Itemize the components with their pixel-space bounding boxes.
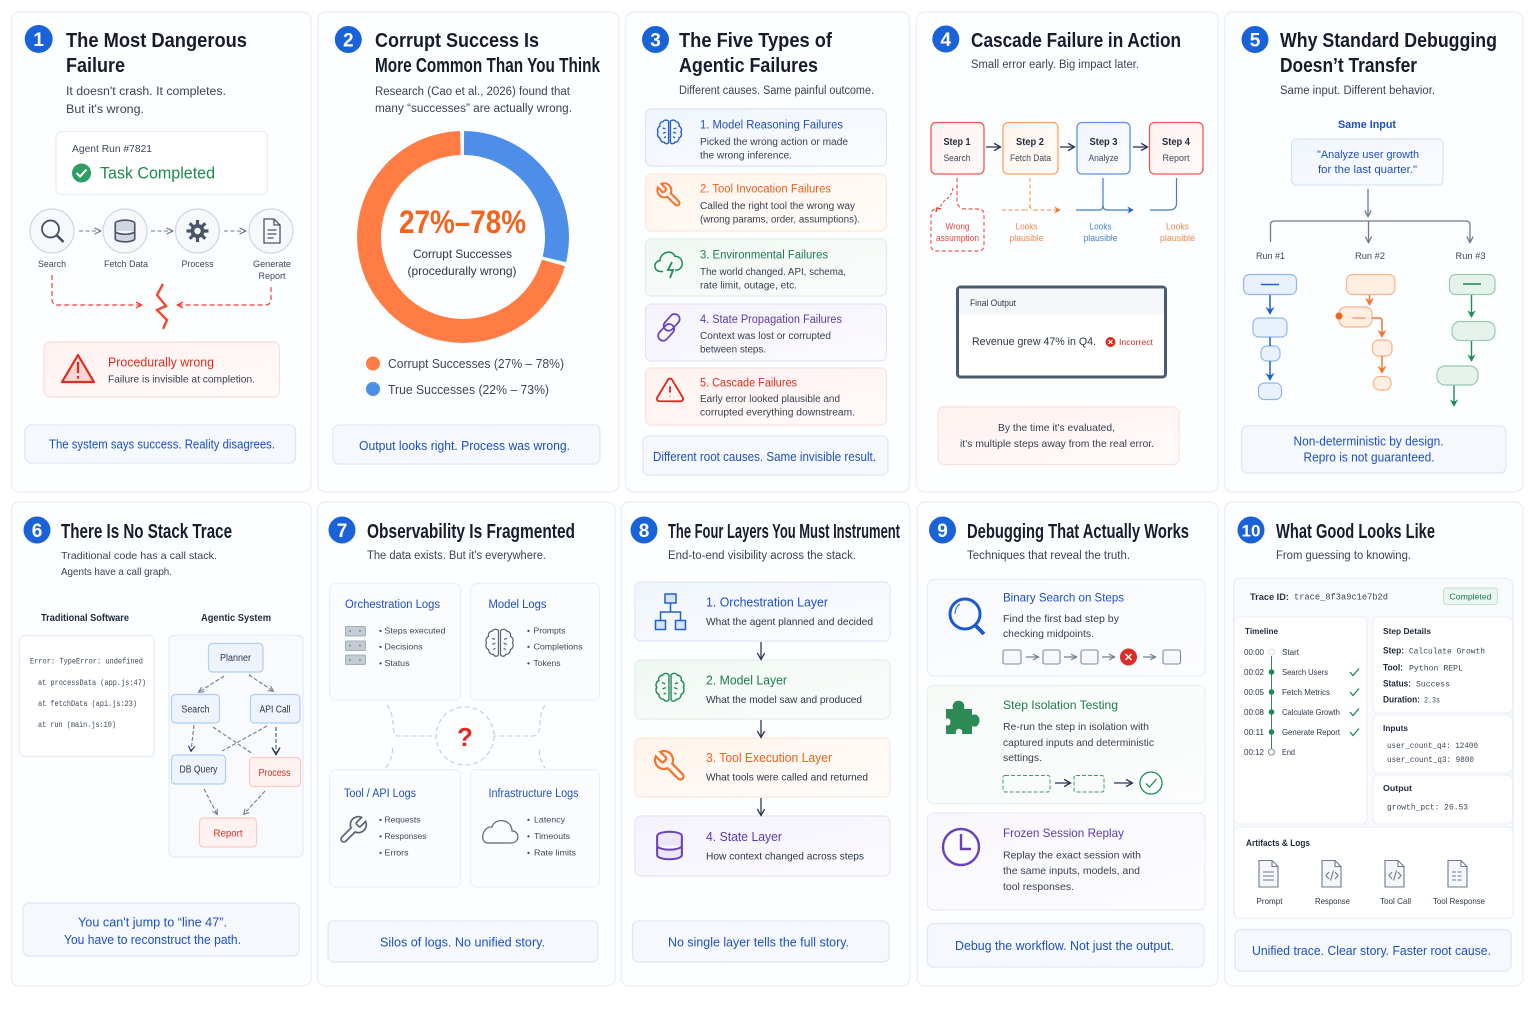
step outcome labels: assumption bbox=[936, 233, 979, 243]
technique: step isolation bbox=[928, 686, 1205, 804]
call graph: Report bbox=[214, 828, 243, 840]
layer 1: orchestration: 1. Orchestration Layer bbox=[706, 596, 828, 610]
row 2: tool invocation: 2. Tool Invocation Failures bbox=[700, 184, 831, 196]
row 3: environmental: rate limit, outage, etc. bbox=[700, 280, 797, 292]
takeaway: You can't jump to “line 47”. bbox=[78, 916, 227, 930]
step boxes: Report bbox=[1162, 153, 1190, 163]
badge 7: 7 bbox=[337, 521, 347, 542]
artifacts card: Response bbox=[1315, 896, 1350, 906]
donut center label: 27%–78% bbox=[399, 204, 526, 240]
agent run card: Agent Run #7821 bbox=[72, 143, 152, 155]
heading: Cascade Failure in Action bbox=[971, 29, 1181, 52]
row 4: state propagation bbox=[646, 304, 886, 361]
pipeline labels: Process bbox=[182, 259, 214, 269]
technique: step isolation: captured inputs and deterministic bbox=[1003, 737, 1154, 749]
silo: orchestration logs bbox=[330, 584, 460, 700]
badge 9 bbox=[929, 516, 956, 544]
row 2: tool invocation bbox=[646, 174, 886, 231]
silo: infrastructure logs bbox=[470, 770, 600, 887]
layer 4: state bbox=[635, 816, 890, 876]
step boxes: Analyze bbox=[1088, 153, 1118, 163]
inputs card bbox=[1373, 715, 1512, 773]
intro text: End-to-end visibility across the stack. bbox=[668, 550, 856, 562]
technique: step isolation: Step Isolation Testing bbox=[1003, 698, 1118, 712]
heading: Why Standard Debugging bbox=[1280, 29, 1497, 52]
timeline card: End bbox=[1282, 747, 1295, 757]
badge 3 bbox=[642, 26, 669, 53]
callout: procedurally wrong bbox=[44, 342, 280, 397]
takeaway bbox=[1242, 426, 1506, 473]
step outcome labels: plausible bbox=[1160, 233, 1195, 243]
intro text: It doesn't crash. It completes. bbox=[66, 86, 226, 98]
technique: frozen session replay: the same inputs, models, and bbox=[1003, 865, 1140, 877]
icon: gear bbox=[186, 220, 208, 242]
silo: orchestration logs: • bbox=[379, 626, 382, 636]
row 1: model reasoning bbox=[646, 109, 886, 166]
column headings: Traditional Software bbox=[41, 613, 129, 624]
silo: tool / api logs: Requests bbox=[384, 814, 420, 824]
call graph: DB Query bbox=[180, 764, 218, 776]
step details card: Success bbox=[1416, 680, 1450, 690]
run labels bbox=[1256, 251, 1486, 261]
badge 5 bbox=[1242, 26, 1268, 53]
timeline card: 00:02 bbox=[1244, 667, 1264, 677]
intro text: Agents have a call graph. bbox=[61, 566, 172, 578]
trace header: Trace ID: bbox=[1250, 592, 1289, 603]
callout bbox=[938, 407, 1179, 464]
intro text: Small error early. Big impact later. bbox=[971, 59, 1139, 71]
final output window bbox=[958, 287, 1166, 377]
trace header: Completed bbox=[1450, 592, 1492, 602]
silo: infrastructure logs: • bbox=[527, 831, 530, 841]
run 3 flow bbox=[1437, 274, 1495, 406]
panel 5: standard debugging bbox=[1224, 12, 1523, 492]
panel 10: what good looks like bbox=[1224, 502, 1523, 986]
intro text: Different causes. Same painful outcome. bbox=[679, 85, 874, 97]
artifacts card bbox=[1234, 827, 1513, 918]
takeaway bbox=[23, 903, 299, 956]
panel 4: cascade failure bbox=[916, 12, 1218, 492]
row 2: tool invocation: Called the right tool the wrong way bbox=[700, 201, 855, 212]
silo: infrastructure logs: • bbox=[527, 814, 530, 824]
artifacts card: Tool Call bbox=[1380, 896, 1411, 906]
failure propagation lines bbox=[931, 178, 1176, 251]
silo: infrastructure logs: Latency bbox=[534, 814, 566, 824]
silo: model logs: Completions bbox=[534, 642, 582, 652]
badge 6 bbox=[24, 516, 50, 544]
failure dashed arrows and lightning bbox=[52, 275, 271, 329]
same input box: for the last quarter." bbox=[1318, 164, 1417, 176]
timeline card: Calculate Growth bbox=[1282, 707, 1340, 717]
layer 4: state: 4. State Layer bbox=[706, 830, 782, 844]
column headings bbox=[41, 613, 271, 624]
step details card: Duration: bbox=[1383, 694, 1420, 704]
run labels: Run #3 bbox=[1456, 251, 1486, 261]
arrows between steps bbox=[79, 230, 245, 232]
silo: model logs: Tokens bbox=[534, 658, 560, 668]
takeaway bbox=[328, 921, 598, 962]
silo: infrastructure logs: Infrastructure Logs bbox=[488, 788, 579, 800]
inputs card: user_count_q3: 9800 bbox=[1387, 755, 1474, 765]
trace header: trace_8f3a9c1e7b2d bbox=[1294, 592, 1388, 602]
heading: Agentic Failures bbox=[679, 54, 818, 77]
silo: orchestration logs: Steps executed bbox=[384, 626, 446, 636]
timeline card: 00:12 bbox=[1244, 747, 1264, 757]
pipeline labels: Search bbox=[38, 259, 66, 269]
output card bbox=[1373, 775, 1512, 824]
timeline card: 00:05 bbox=[1244, 687, 1264, 697]
pipeline labels: Fetch Data bbox=[104, 259, 148, 269]
row 1: model reasoning: 1. Model Reasoning Failures bbox=[700, 120, 843, 132]
callout: procedurally wrong: Failure is invisible at completion. bbox=[108, 374, 255, 386]
technique: frozen session replay: tool responses. bbox=[1003, 881, 1074, 893]
panel 8: four layers bbox=[621, 502, 910, 986]
timeline card: 00:11 bbox=[1244, 727, 1264, 737]
call graph bbox=[169, 636, 303, 857]
call graph: Process bbox=[258, 768, 290, 779]
intro text: Techniques that reveal the truth. bbox=[967, 550, 1130, 562]
call graph: Search bbox=[182, 704, 210, 716]
timeline card bbox=[1234, 617, 1367, 824]
same input box: Same Input bbox=[1338, 119, 1396, 131]
badge 1: 1 bbox=[33, 30, 44, 51]
silo: model logs bbox=[470, 584, 600, 700]
panel 3: five types bbox=[626, 12, 910, 492]
technique: binary search: checking midpoints. bbox=[1003, 628, 1094, 640]
badge 1 bbox=[25, 25, 53, 53]
heading: The Five Types of bbox=[679, 29, 832, 52]
takeaway: No single layer tells the full story. bbox=[668, 936, 849, 950]
panel 7: observability bbox=[318, 502, 615, 986]
intro text bbox=[66, 86, 226, 116]
branching arrows bbox=[1270, 189, 1470, 242]
takeaway bbox=[632, 921, 889, 962]
panel 1: most dangerous failure bbox=[12, 12, 311, 492]
panel 9: debugging that works bbox=[917, 502, 1218, 986]
inputs card: user_count_q4: 12400 bbox=[1387, 741, 1478, 751]
panel 6: no stack trace bbox=[12, 502, 311, 986]
timeline card: Search Users bbox=[1282, 667, 1328, 677]
badge 7 bbox=[328, 516, 356, 544]
technique: binary search: Find the first bad step by bbox=[1003, 613, 1120, 625]
takeaway: The system says success. Reality disagrees. bbox=[49, 438, 275, 452]
step outcome labels: Looks bbox=[1016, 222, 1038, 232]
badge 10: 10 bbox=[1242, 522, 1260, 540]
callout: it's multiple steps away from the real error. bbox=[960, 438, 1154, 450]
final output window: Revenue grew 47% in Q4. bbox=[972, 336, 1096, 348]
row 5: cascade bbox=[646, 368, 886, 425]
intro text: Same input. Different behavior. bbox=[1280, 85, 1435, 97]
heading: Observability Is Fragmented bbox=[367, 520, 575, 543]
step boxes: Search bbox=[944, 153, 970, 163]
layer 3: tool execution: What tools were called and returned bbox=[706, 772, 868, 784]
silo: tool / api logs: • bbox=[379, 848, 382, 858]
column headings: Agentic System bbox=[201, 613, 271, 624]
silo: model logs: Prompts bbox=[534, 626, 566, 636]
silo: orchestration logs: • bbox=[379, 642, 382, 652]
silo: model logs: • bbox=[527, 642, 530, 652]
call graph: Planner bbox=[220, 653, 252, 664]
donut center label bbox=[399, 204, 526, 278]
layer 1: orchestration: What the agent planned and decided bbox=[706, 616, 873, 628]
timeline card: Generate Report bbox=[1282, 727, 1341, 737]
layer 2: model: What the model saw and produced bbox=[706, 694, 862, 706]
row 4: state propagation: 4. State Propagation Failures bbox=[700, 314, 842, 326]
heading bbox=[1280, 29, 1497, 77]
silo: tool / api logs: • bbox=[379, 814, 382, 824]
heading: The Four Layers You Must Instrument bbox=[668, 520, 900, 543]
step boxes: Step 2 bbox=[1016, 136, 1044, 148]
run 1 flow bbox=[1244, 274, 1296, 400]
technique: frozen session replay: Replay the exact session with bbox=[1003, 850, 1141, 862]
step boxes bbox=[931, 122, 1203, 174]
silo: orchestration logs: • bbox=[379, 658, 382, 668]
inputs card: Inputs bbox=[1383, 723, 1408, 733]
badge 2 bbox=[335, 26, 362, 53]
missing link: question mark bbox=[386, 705, 545, 768]
step outcome labels: plausible bbox=[1084, 233, 1118, 243]
takeaway: You have to reconstruct the path. bbox=[64, 933, 241, 947]
heading: Failure bbox=[66, 54, 125, 77]
intro text bbox=[61, 550, 217, 578]
silo: tool / api logs: Errors bbox=[384, 848, 408, 858]
heading bbox=[679, 29, 832, 77]
run 2 flow bbox=[1336, 274, 1395, 390]
pipeline labels: Report bbox=[258, 271, 286, 281]
step boxes: Fetch Data bbox=[1010, 153, 1051, 163]
heading: Doesn’t Transfer bbox=[1280, 54, 1417, 77]
legend: Corrupt Successes (27% – 78%) bbox=[388, 357, 564, 371]
step details card: Step: bbox=[1383, 646, 1404, 656]
row 3: environmental: The world changed. API, schema, bbox=[700, 267, 846, 278]
heading: There Is No Stack Trace bbox=[61, 520, 232, 543]
call graph: API Call bbox=[260, 704, 290, 716]
silo: orchestration logs: Orchestration Logs bbox=[345, 599, 440, 611]
badge 8: 8 bbox=[639, 521, 649, 542]
layer 2: model bbox=[635, 660, 890, 719]
agent run card bbox=[56, 132, 268, 194]
icon: database bbox=[115, 220, 135, 242]
takeaway bbox=[928, 924, 1204, 967]
trace dashboard bbox=[1234, 578, 1513, 918]
row 2: tool invocation: (wrong params, order, assumptions). bbox=[700, 214, 860, 226]
icon: report document bbox=[264, 219, 280, 243]
step details card: Tool: bbox=[1383, 662, 1403, 672]
row 5: cascade: 5. Cascade Failures bbox=[700, 378, 797, 390]
legend: True Successes (22% – 73%) bbox=[388, 383, 549, 397]
step outcome labels: plausible bbox=[1010, 233, 1044, 243]
takeaway: Debug the workflow. Not just the output. bbox=[955, 939, 1174, 953]
timeline card: Start bbox=[1282, 647, 1300, 657]
layer arrows bbox=[760, 642, 762, 815]
layer 3: tool execution bbox=[635, 738, 890, 797]
intro text: many “successes” are actually wrong. bbox=[375, 103, 572, 115]
silo: orchestration logs: Decisions bbox=[384, 642, 422, 652]
takeaway bbox=[1235, 930, 1511, 971]
takeaway: Silos of logs. No unified story. bbox=[380, 936, 545, 950]
output card: growth_pct: 26.53 bbox=[1387, 802, 1468, 812]
intro text: The data exists. But it's everywhere. bbox=[367, 550, 546, 562]
step details card: Status: bbox=[1383, 678, 1411, 688]
pipeline steps bbox=[30, 209, 293, 281]
pipeline labels: Generate bbox=[253, 259, 291, 269]
step outcome labels bbox=[936, 222, 1195, 243]
heading bbox=[66, 29, 247, 77]
layer 4: state: How context changed across steps bbox=[706, 850, 864, 862]
output card: Output bbox=[1383, 783, 1412, 793]
silo: infrastructure logs: Timeouts bbox=[534, 831, 570, 841]
technique: binary search: Binary Search on Steps bbox=[1003, 590, 1124, 604]
step outcome labels: Wrong bbox=[946, 222, 970, 232]
badge 2: 2 bbox=[343, 30, 354, 52]
timeline card: 00:00 bbox=[1244, 647, 1264, 657]
donut center label: (procedurally wrong) bbox=[408, 264, 516, 278]
artifacts card: Prompt bbox=[1256, 896, 1283, 906]
stack trace box: Error: TypeError: undefined bbox=[30, 656, 143, 666]
intro text bbox=[375, 86, 572, 115]
stack trace box bbox=[20, 636, 154, 756]
badge 3: 3 bbox=[650, 30, 661, 52]
silo: tool / api logs: Tool / API Logs bbox=[344, 788, 416, 800]
icon: search bbox=[42, 220, 64, 242]
pipeline labels bbox=[38, 259, 291, 281]
takeaway bbox=[25, 425, 296, 463]
silo: tool / api logs bbox=[330, 770, 460, 887]
row 5: cascade: Early error looked plausible and bbox=[700, 394, 840, 405]
stack trace box: at processData (app.js:47) bbox=[38, 678, 146, 688]
takeaway bbox=[333, 425, 600, 464]
heading: Corrupt Success Is bbox=[375, 29, 539, 52]
takeaway bbox=[643, 436, 888, 475]
row 4: state propagation: Context was lost or corrupted bbox=[700, 331, 831, 342]
step details card: Calculate Growth bbox=[1409, 646, 1485, 656]
row 4: state propagation: between steps. bbox=[700, 344, 766, 356]
silo: infrastructure logs: • bbox=[527, 848, 530, 858]
heading bbox=[375, 29, 600, 77]
intro text: Research (Cao et al., 2026) found that bbox=[375, 86, 571, 98]
technique: step isolation: settings. bbox=[1003, 752, 1042, 764]
stack trace box: at run (main.js:10) bbox=[38, 720, 116, 730]
final output window: Incorrect bbox=[1119, 337, 1154, 347]
artifacts card: Tool Response bbox=[1433, 896, 1485, 906]
row 5: cascade: corrupted everything downstream. bbox=[700, 408, 855, 418]
badge 6: 6 bbox=[32, 521, 42, 542]
step outcome labels: Looks bbox=[1090, 222, 1112, 232]
silo: infrastructure logs: Rate limits bbox=[534, 848, 576, 858]
same input box: "Analyze user growth bbox=[1317, 149, 1419, 161]
step details card: Step Details bbox=[1383, 626, 1431, 636]
missing link: question mark: ? bbox=[457, 722, 473, 752]
run labels: Run #2 bbox=[1355, 251, 1385, 261]
silo: tool / api logs: Responses bbox=[384, 831, 426, 841]
timeline card: 00:08 bbox=[1244, 707, 1264, 717]
step boxes: Step 1 bbox=[944, 136, 971, 148]
layer 2: model: 2. Model Layer bbox=[706, 674, 787, 688]
silo: model logs: • bbox=[527, 658, 530, 668]
timeline card: Timeline bbox=[1245, 626, 1278, 636]
row 3: environmental bbox=[646, 239, 886, 296]
row 3: environmental: 3. Environmental Failures bbox=[700, 250, 828, 262]
agent run card: Task Completed bbox=[100, 164, 215, 182]
takeaway: Unified trace. Clear story. Faster root cause. bbox=[1252, 944, 1491, 958]
stack trace box: at fetchData (api.js:23) bbox=[38, 699, 137, 709]
badge 4 bbox=[932, 26, 959, 52]
layer 1: orchestration bbox=[635, 582, 890, 641]
silo: model logs: • bbox=[527, 626, 530, 636]
step boxes: Step 3 bbox=[1090, 136, 1118, 148]
artifacts card: Artifacts & Logs bbox=[1246, 838, 1310, 848]
badge 9: 9 bbox=[937, 521, 948, 542]
badge 4: 4 bbox=[941, 30, 952, 51]
silo: tool / api logs: • bbox=[379, 831, 382, 841]
heading: The Most Dangerous bbox=[66, 29, 247, 52]
step details card bbox=[1373, 617, 1512, 713]
run labels: Run #1 bbox=[1256, 251, 1285, 261]
takeaway: Non-deterministic by design. bbox=[1294, 434, 1444, 448]
step outcome labels: Looks bbox=[1166, 222, 1189, 232]
silo: orchestration logs: Status bbox=[384, 658, 410, 668]
final output window: Final Output bbox=[970, 298, 1016, 308]
donut center label: Corrupt Successes bbox=[413, 247, 512, 261]
step details card: Python REPL bbox=[1409, 664, 1463, 674]
row 1: model reasoning: the wrong inference. bbox=[700, 150, 792, 162]
step details card: 2.3s bbox=[1424, 696, 1440, 706]
same input box bbox=[1292, 119, 1443, 185]
technique: binary search bbox=[928, 580, 1205, 676]
callout: procedurally wrong: Procedurally wrong bbox=[108, 354, 214, 370]
heading: What Good Looks Like bbox=[1276, 520, 1435, 543]
badge 10 bbox=[1238, 516, 1264, 544]
trace header bbox=[1250, 588, 1498, 604]
legend bbox=[366, 356, 564, 397]
takeaway: Repro is not guaranteed. bbox=[1304, 450, 1434, 464]
arrows between steps bbox=[986, 146, 1147, 148]
heading: Debugging That Actually Works bbox=[967, 520, 1189, 543]
row 1: model reasoning: Picked the wrong action or made bbox=[700, 137, 848, 148]
donut chart bbox=[369, 143, 557, 331]
technique: frozen session replay bbox=[928, 813, 1205, 910]
heading: More Common Than You Think bbox=[375, 54, 600, 77]
step boxes: Step 4 bbox=[1162, 136, 1190, 148]
badge 8 bbox=[630, 516, 658, 544]
intro text: But it's wrong. bbox=[66, 104, 144, 116]
silo: model logs: Model Logs bbox=[488, 599, 547, 611]
intro text: From guessing to knowing. bbox=[1276, 550, 1411, 562]
layer 3: tool execution: 3. Tool Execution Layer bbox=[706, 751, 832, 765]
timeline card: Fetch Metrics bbox=[1282, 687, 1330, 697]
takeaway: Output looks right. Process was wrong. bbox=[359, 439, 570, 453]
technique: frozen session replay: Frozen Session Replay bbox=[1003, 826, 1124, 840]
technique: step isolation: Re-run the step in isolation with bbox=[1003, 721, 1149, 733]
callout: By the time it's evaluated, bbox=[998, 422, 1115, 434]
takeaway: Different root causes. Same invisible result. bbox=[653, 450, 876, 464]
badge 5: 5 bbox=[1250, 30, 1261, 52]
panel 2: corrupt success bbox=[318, 12, 619, 492]
intro text: Traditional code has a call stack. bbox=[61, 550, 217, 562]
